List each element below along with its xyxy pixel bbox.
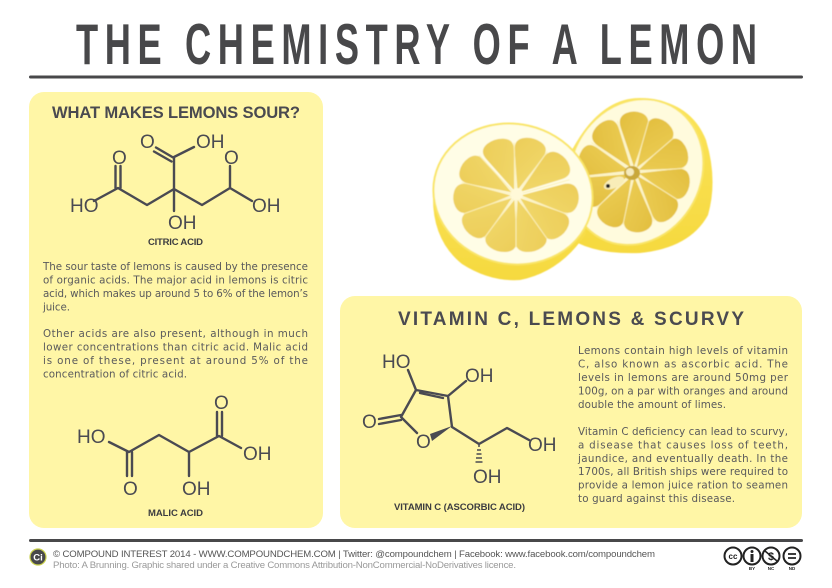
text block: other acids: is one of these, present at around 5% of the [43,355,308,367]
icon: creative commons licence: ND [789,566,796,571]
icon: creative commons licence: cc [729,552,738,561]
right lemon [543,75,729,269]
icon: creative commons licence: $ [768,551,774,563]
text block: lemons contain: C, also known as ascorbic acid. The [578,358,788,370]
text block: sour taste [42,261,308,314]
text block: sour taste: The sour taste of lemons is caused by the presence [42,261,308,273]
heading: vitamin c: VITAMIN C, LEMONS & SCURVY [398,309,744,330]
text block: deficiency: jaundice, and eventually death. In the [577,453,788,465]
molecule: vitamin c: OH [473,467,502,488]
text block: other acids [43,328,308,380]
text block: deficiency: 1700s, all British ships were required to [578,466,788,478]
footer rule [29,539,803,542]
icon: compound interest logo [30,549,46,565]
text block: sour taste: juice. [42,302,70,314]
icon: compound interest logo: Ci [33,552,43,564]
text block: other acids: Other acids are also present, although in much [43,328,308,340]
text block: sour taste: of organic acids. The major acid in lemons is citric [43,274,308,286]
heading: lemons sour: WHAT MAKES LEMONS SOUR? [52,103,300,122]
text block: lemons contain: double the amount of limes. [578,399,726,411]
molecule: citric acid: OH [196,132,224,153]
molecule: citric acid [70,132,280,234]
caption: vitamin c: VITAMIN C (ASCORBIC ACID) [394,502,525,513]
molecule: vitamin c: OH [465,366,494,387]
footer credits: Photo: A Brunning. Graphic shared under a Creative Commons Attribution-NonCommercial-NoDerivatives licence. [53,560,516,571]
molecule: vitamin c: HO [382,352,410,373]
molecule: vitamin c: O [416,432,431,453]
text block: deficiency: provide a lemon juice ration to seamen [578,480,788,492]
title rule [29,76,803,78]
molecule: malic acid: O [214,393,229,414]
molecule: vitamin c: O [362,412,377,433]
panel: vitamin c [340,296,802,528]
molecule: citric acid: OH [252,196,280,217]
text block: lemons contain [578,345,789,411]
molecule: malic acid [77,393,272,500]
panel: what makes lemons sour [29,92,323,528]
caption: malic acid: MALIC ACID [148,508,203,519]
molecule: citric acid: OH [168,213,196,234]
text block: deficiency: Vitamin C deficiency can lead to scurvy, [578,426,788,438]
title: THE CHEMISTRY OF A LEMON [76,14,757,77]
footer credits [53,549,655,571]
left lemon [420,109,606,280]
molecule: citric acid: O [224,148,239,169]
molecule: malic acid: OH [182,479,210,500]
text block: other acids: concentration of citric acid. [43,368,187,380]
text block: lemons contain: 100g, on a par with oranges and around [578,386,788,398]
text block: lemons contain: Lemons contain high levels of vitamin [578,345,788,357]
molecule: malic acid: O [123,479,138,500]
molecule: malic acid: OH [243,444,272,465]
text block: deficiency: to guard against this disease. [578,493,735,505]
molecule: citric acid: O [112,148,127,169]
text block: other acids: lower concentrations than citric acid. Malic acid [43,342,308,354]
text block: deficiency [577,426,788,505]
footer credits: © COMPOUND INTEREST 2014 - WWW.COMPOUNDCHEM.COM | Twitter: @compoundchem | Facebook: www.facebook.com/compoundchem [53,549,655,560]
icon: creative commons licence [724,548,800,571]
text block: deficiency: a disease that causes loss of teeth, [578,440,788,452]
text block: sour taste: acid, which makes up around 5 to 6% of the lemon’s [43,288,308,300]
molecule: citric acid: O [140,132,155,153]
caption: citric acid: CITRIC ACID [148,237,203,248]
photo: lemon halves [420,75,729,280]
text block: lemons contain: levels in lemons are around 50mg per [578,372,789,384]
icon: creative commons licence: NC [768,566,775,571]
molecule: malic acid: HO [77,427,106,448]
molecule: vitamin c [362,352,556,488]
molecule: citric acid: HO [70,196,98,217]
icon: creative commons licence: BY [749,566,755,571]
molecule: vitamin c: OH [528,435,556,456]
